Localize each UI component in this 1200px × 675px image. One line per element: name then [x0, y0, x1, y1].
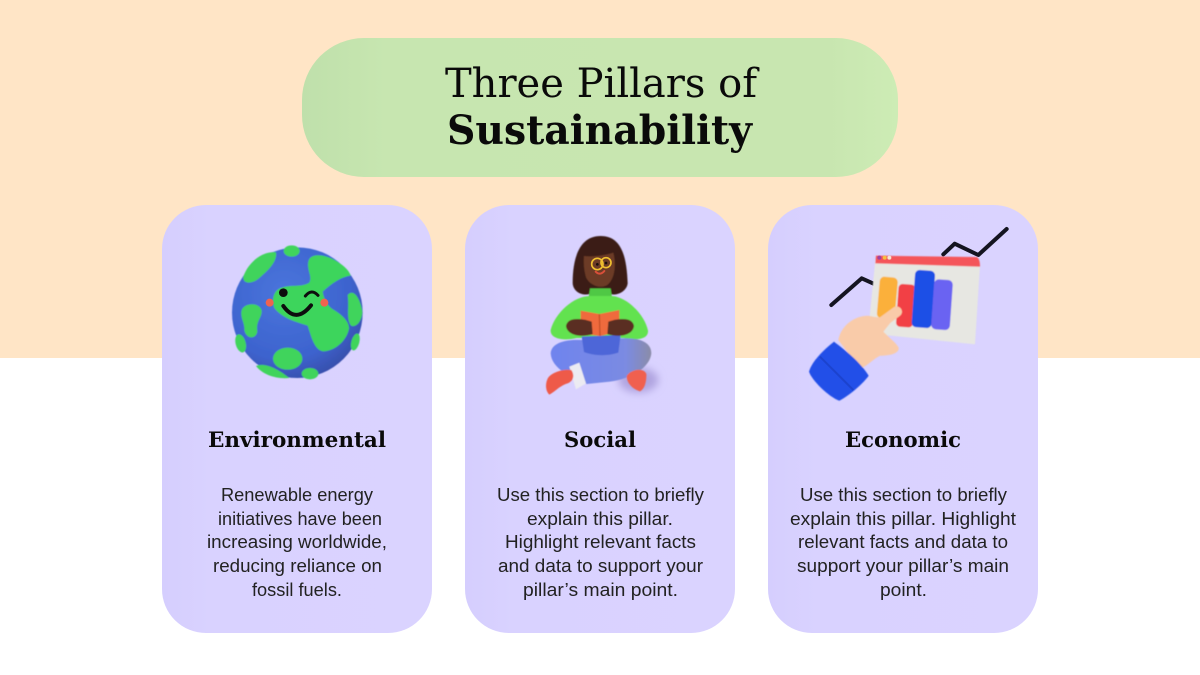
heading: social: Social — [564, 427, 636, 452]
text: economic body: Use this section to briefly — [800, 485, 1007, 505]
text: economic body: support your pillar’s main — [797, 556, 1009, 576]
heading: economic: Economic — [845, 427, 961, 452]
text: economic body: point. — [880, 580, 927, 600]
text: social body: pillar’s main point. — [523, 580, 678, 600]
icon: hand touching bar chart — [809, 229, 1007, 401]
background: peach band — [0, 0, 1200, 358]
panel: environmental — [162, 205, 432, 633]
text: environmental body — [207, 485, 387, 600]
heading: environmental: Environmental — [208, 427, 386, 452]
title: Sustainability — [447, 107, 754, 154]
text: social body: and data to support your — [498, 556, 703, 576]
panel: economic — [768, 205, 1038, 633]
text: economic body — [790, 485, 1016, 600]
text: environmental body: increasing worldwide, — [207, 532, 387, 552]
text: environmental body: fossil fuels. — [252, 580, 342, 600]
panel: social — [465, 205, 735, 633]
icon: person reading a book — [546, 236, 658, 395]
text: environmental body: reducing reliance on — [213, 556, 382, 576]
text: social body: Use this section to briefly — [497, 485, 704, 505]
title — [445, 61, 760, 154]
icon: smiling globe — [232, 245, 363, 379]
text: economic body: relevant facts and data to — [798, 532, 1008, 552]
text: environmental body: initiatives have been — [218, 509, 382, 529]
title pill — [302, 38, 898, 177]
title: Three Pillars of — [445, 61, 760, 107]
text: social body: Highlight relevant facts — [505, 532, 696, 552]
text: social body: explain this pillar. — [527, 509, 673, 529]
text: social body — [497, 485, 704, 600]
text: economic body: explain this pillar. Highlight — [790, 509, 1016, 529]
text: environmental body: Renewable energy — [221, 485, 373, 505]
